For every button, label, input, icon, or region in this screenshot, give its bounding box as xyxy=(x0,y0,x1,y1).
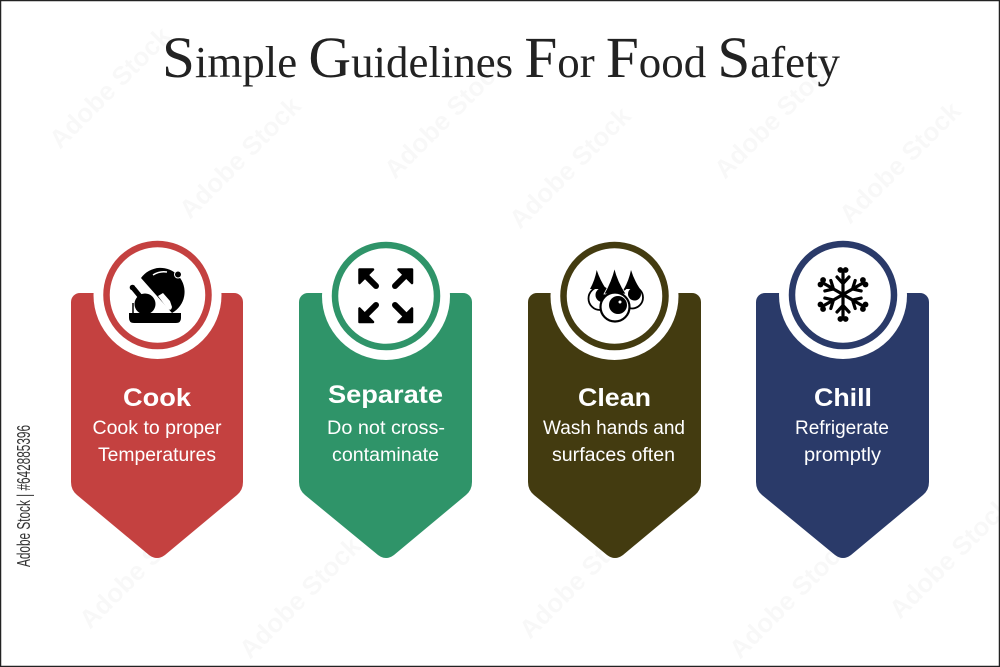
panel: separate xyxy=(299,232,472,558)
card shape: cook xyxy=(71,293,243,558)
watermark pattern: Adobe Stock xyxy=(723,530,857,664)
panel: clean xyxy=(528,232,701,558)
description: clean: Wash hands and xyxy=(543,418,685,439)
watermark pattern: Adobe Stock xyxy=(503,100,637,234)
panel: cook xyxy=(71,231,243,558)
watermark pattern: Adobe Stock xyxy=(173,90,307,224)
watermark pattern: Adobe Stock xyxy=(378,50,512,184)
card shape: chill xyxy=(756,293,929,558)
description: chill: Refrigerate xyxy=(795,418,889,439)
watermark pattern: Adobe Stock xyxy=(513,510,647,644)
card shape: clean xyxy=(528,293,701,558)
watermark pattern: Adobe Stock xyxy=(43,20,177,154)
icon ring: chill xyxy=(779,231,907,359)
icon: four outward arrows xyxy=(360,270,412,322)
icon ring: cook xyxy=(94,231,222,359)
heading: cook: Cook xyxy=(123,384,191,412)
title: Simple Guidelines For Food Safety xyxy=(162,25,840,90)
description: chill: promptly xyxy=(804,445,882,466)
description: clean xyxy=(543,418,685,466)
icon ring: clean xyxy=(550,232,678,360)
description: separate xyxy=(327,418,445,466)
description: cook xyxy=(92,418,222,466)
icon ring: separate xyxy=(322,232,450,360)
watermark pattern: Adobe Stock xyxy=(73,500,207,634)
description: separate: Do not cross- xyxy=(327,418,445,439)
description: clean: surfaces often xyxy=(552,445,675,466)
description: cook: Temperatures xyxy=(98,445,216,466)
heading: clean: Clean xyxy=(578,384,651,412)
panel: chill xyxy=(756,231,929,558)
heading: chill: Chill xyxy=(814,384,872,412)
card shape: separate xyxy=(299,293,472,558)
watermark pattern: Adobe Stock xyxy=(233,530,367,664)
icon: covered roast chicken xyxy=(129,268,185,323)
stock id caption: Adobe Stock | #642885396 xyxy=(14,425,34,567)
description: chill xyxy=(795,418,889,466)
watermark pattern: Adobe Stock xyxy=(833,95,967,229)
description: cook: Cook to proper xyxy=(92,418,222,439)
icon: water drops xyxy=(588,268,643,322)
icon: snowflake xyxy=(816,267,870,322)
watermark pattern: Adobe Stock xyxy=(708,50,842,184)
description: separate: contaminate xyxy=(332,445,439,466)
heading: separate: Separate xyxy=(328,381,443,409)
